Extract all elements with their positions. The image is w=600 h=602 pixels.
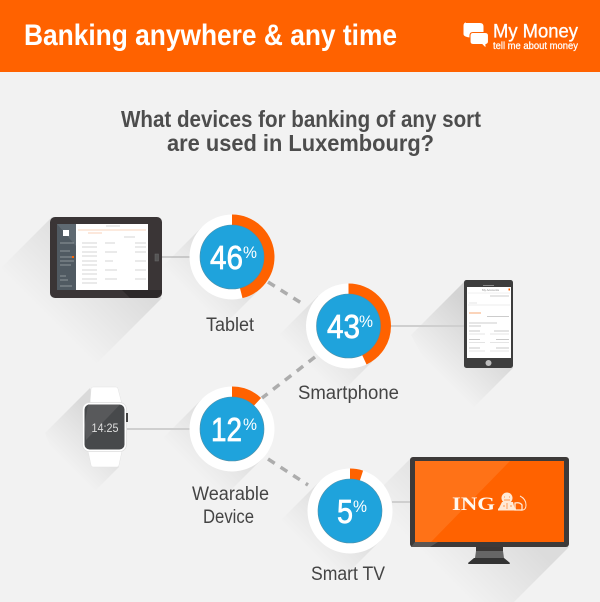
logo: My Money: tell me about money: [493, 41, 578, 52]
logo: My Money: My Money: [493, 22, 578, 42]
label: Wearable Device: [192, 484, 269, 528]
device connector lines: [126, 257, 464, 502]
heading: What devices for banking of any sort: [121, 106, 481, 132]
icon: tablet: [50, 217, 162, 298]
label: Wearable Device: Device: [203, 507, 254, 528]
icon: smart TV: [410, 457, 569, 564]
donut: Smartphone 43%: 43: [327, 308, 360, 345]
donut: Wearable Device 12%: [190, 386, 274, 472]
ING logo: ING: [452, 494, 495, 515]
heading: are used in Luxembourg?: [167, 130, 434, 156]
donut: Wearable Device 12%: 12: [211, 411, 242, 448]
header band: [0, 0, 600, 72]
donut: Smart TV 5%: %: [353, 497, 367, 516]
label: Tablet: Tablet: [206, 315, 255, 336]
donut: Tablet 46%: 46: [210, 239, 243, 276]
donut: Tablet 46%: [190, 214, 274, 300]
label: Smartphone: Smartphone: [298, 383, 399, 404]
donut: Tablet 46%: %: [243, 243, 257, 262]
donut: Smartphone 43%: %: [359, 312, 373, 331]
heading: [121, 106, 481, 156]
donut: Smartphone 43%: [306, 284, 391, 368]
label: Smart TV: Smart TV: [311, 564, 385, 585]
logo: My Money: [464, 22, 578, 52]
icon: smartwatch: [82, 387, 128, 467]
icon: smartphone: [464, 280, 513, 368]
donut: Smart TV 5%: [308, 468, 392, 554]
icon: smartwatch: 14:25: [92, 423, 118, 435]
long shadows: [0, 217, 569, 602]
ING logo: [452, 492, 526, 515]
donut: Smart TV 5%: 5: [337, 493, 353, 530]
icon: smartphone: My Accounts: [482, 288, 500, 292]
dashed connectors: [262, 282, 315, 485]
label: Wearable Device: Wearable: [192, 484, 269, 505]
donut: Wearable Device 12%: %: [243, 415, 257, 434]
title: Banking anywhere & any time: [24, 19, 397, 52]
